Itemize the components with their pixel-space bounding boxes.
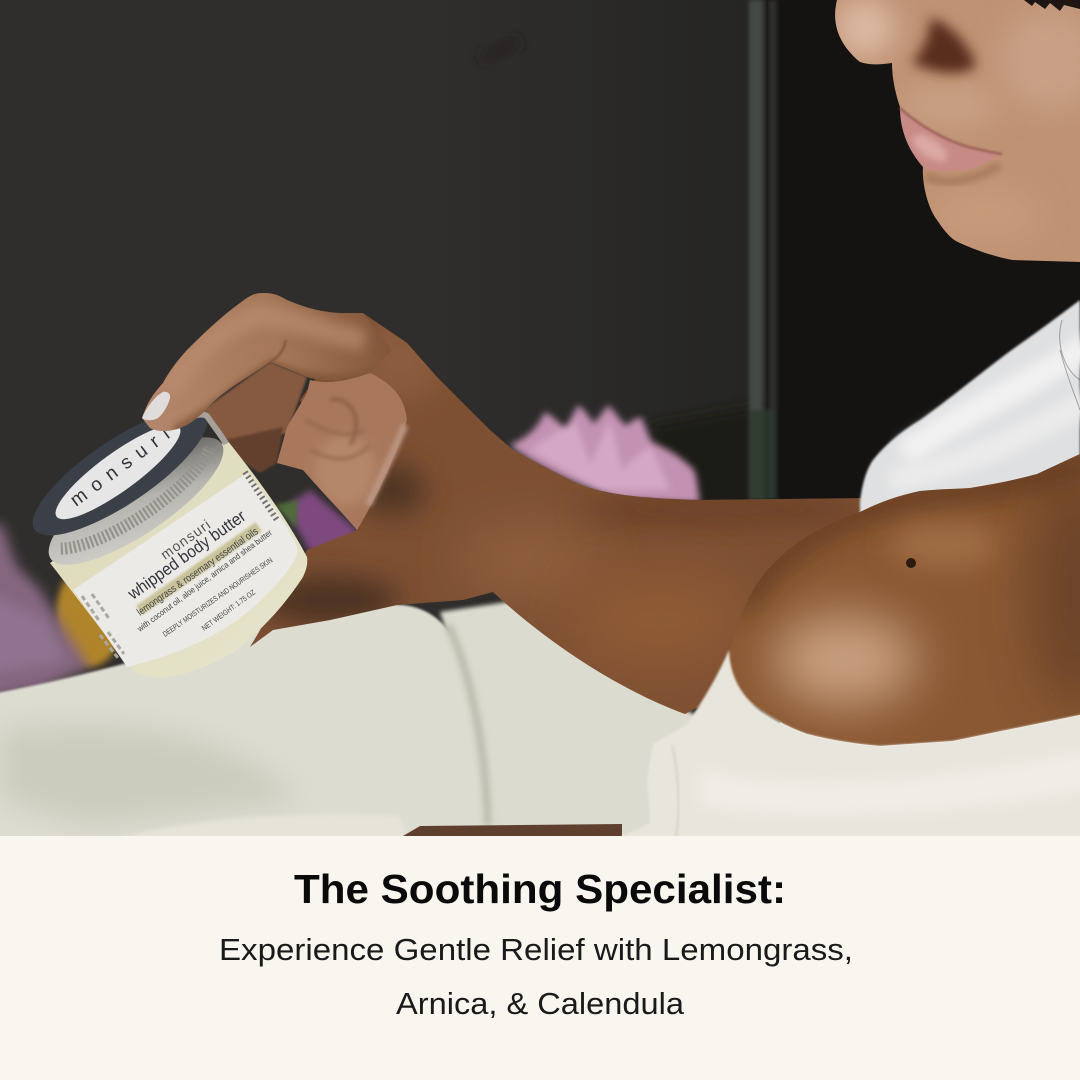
jar: [17, 388, 307, 677]
mole on shoulder: [906, 558, 916, 568]
glass pillar: [749, 0, 777, 500]
photo: woman holding a jar of body butter: [0, 0, 1080, 836]
chin light: [927, 199, 988, 254]
label text: ingredients: with coconut oil, aloe juice, arnica and shea butter: [135, 527, 274, 634]
upper lit patch: [890, 523, 1000, 567]
lid brand text: monsuri: [66, 424, 174, 511]
jar label: [73, 473, 297, 667]
face: [820, 0, 1080, 270]
lid label: [45, 412, 191, 532]
fingernail: [142, 392, 170, 420]
label text: claim: DEEPLY MOISTURIZES AND NOURISHES SKIN: [161, 556, 274, 639]
back of hand and forearm: [240, 300, 880, 720]
lid top: [17, 388, 223, 556]
dark shelf band by the pillar: [640, 405, 760, 510]
dark room area behind glass: [766, 0, 1080, 520]
under-lip shadow: [925, 165, 1000, 182]
index finger over the lid: [142, 293, 392, 431]
white top, lower drape: [622, 650, 1080, 850]
lid lower band: [32, 416, 240, 586]
third finger: [225, 427, 283, 473]
palm fold highlight: [368, 425, 405, 505]
finger top light: [165, 315, 365, 395]
highlighted ingredient strip: [136, 522, 262, 615]
finger under shadow: [175, 366, 375, 432]
sofa front cushion: [0, 604, 622, 850]
purple flower between the fingers: [288, 490, 357, 552]
shoulder right shade: [1030, 470, 1080, 710]
shoulder strap of white top: [860, 300, 1080, 530]
shoulder shadow rim: [740, 462, 1080, 610]
hand and arm: [203, 300, 880, 720]
nostril shadow: [912, 18, 976, 73]
lid ridges: [61, 448, 220, 564]
second finger: [203, 362, 307, 447]
shoulder highlight: [773, 614, 917, 706]
caption text: [219, 866, 853, 1021]
jar body: [50, 440, 307, 677]
lip highlight: [908, 129, 952, 167]
pink flower, back: [510, 405, 700, 503]
label text: product name: whipped body butter: [124, 506, 250, 604]
shoulder: [732, 454, 1080, 746]
label text: net weight: NET WEIGHT: 1.75 OZ: [200, 588, 257, 633]
dark wall background: [0, 0, 780, 836]
lips: [900, 108, 1002, 171]
green leaf: [275, 500, 298, 528]
side label small print: [82, 594, 124, 658]
subtitle line 2: Arnica, & Calendula: [396, 986, 685, 1021]
eyelashes: [1024, 0, 1080, 11]
label text: essential oils: lemongrass & rosemary essential oils: [135, 525, 260, 618]
caption panel: [0, 836, 1080, 1080]
label text: brand: monsuri: [157, 516, 214, 562]
dark smudge on wall: [477, 34, 523, 66]
upper lip area light: [900, 83, 1000, 127]
curled palm: [277, 373, 407, 530]
lip line: [900, 108, 1002, 154]
knuckle crease: [270, 340, 286, 362]
lid silver rim highlight: [180, 414, 226, 444]
cheek: [1000, 10, 1080, 110]
nose highlight: [835, 0, 895, 58]
lilac flower, left: [0, 525, 90, 700]
yellow flower, left: [56, 563, 124, 667]
sofa back cushion: [440, 600, 720, 850]
heading: The Soothing Specialist:: [294, 866, 786, 912]
subtitle line 1: Experience Gentle Relief with Lemongrass,: [219, 932, 853, 967]
label edge pattern: [245, 472, 277, 520]
